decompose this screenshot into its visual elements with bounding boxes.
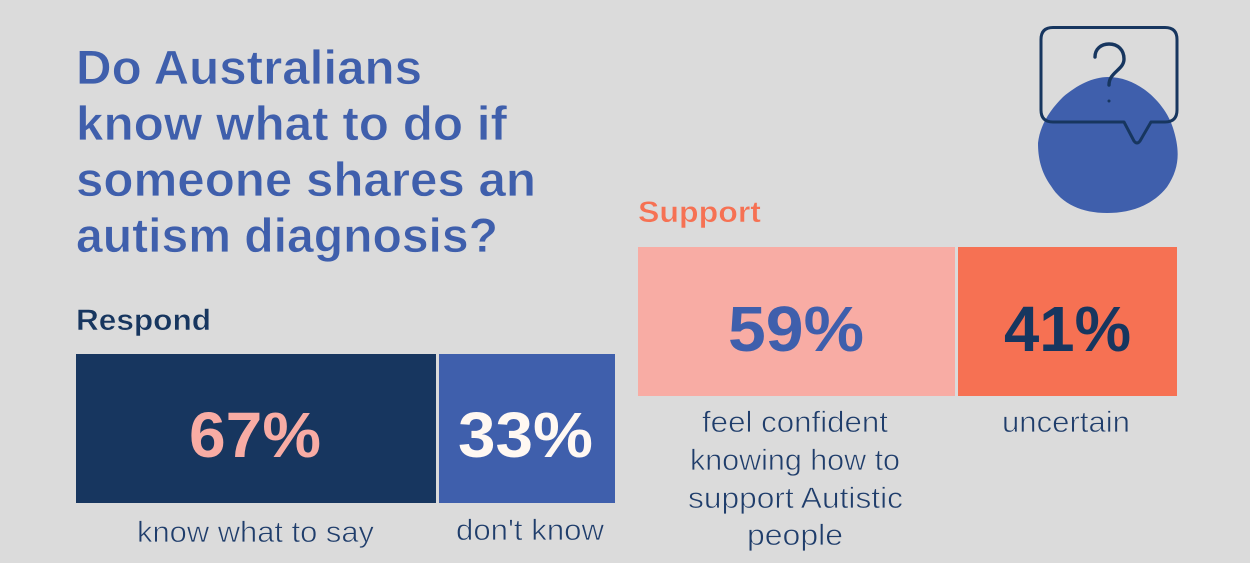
label: don't know: don't know: [456, 514, 604, 547]
bar: 67% know what to say: [76, 354, 436, 503]
bar: 59% feel confident: [638, 247, 955, 396]
title: Do Australians: [76, 42, 422, 95]
title: [76, 42, 536, 263]
label: feel confident knowing how to support Autistic people: support Autistic: [688, 482, 903, 515]
bar: 33% don't know: [439, 354, 615, 503]
bar: 33% don't know: 33%: [458, 399, 593, 471]
icon: speech bubble with question mark over blue blob: [1038, 28, 1178, 213]
label: feel confident knowing how to support Autistic people: knowing how to: [690, 444, 900, 477]
bar: 41% uncertain: [958, 247, 1177, 396]
panel: support: [638, 196, 1177, 552]
label: know what to say: know what to say: [137, 516, 374, 549]
panel: respond: [76, 304, 615, 549]
label: feel confident knowing how to support Autistic people: [688, 406, 903, 552]
title: autism diagnosis?: [76, 210, 498, 263]
label: uncertain: uncertain: [1002, 406, 1130, 439]
bar: 41% uncertain: 41%: [1004, 293, 1131, 365]
title: know what to do if: [76, 98, 508, 151]
heading: respond: Respond: [76, 304, 211, 337]
label: feel confident knowing how to support Autistic people: feel confident: [702, 406, 889, 439]
bar: 67% know what to say: 67%: [189, 399, 321, 471]
bar: 59% feel confident: 59%: [728, 293, 864, 365]
label: feel confident knowing how to support Autistic people: people: [747, 519, 843, 552]
title: someone shares an: [76, 154, 536, 207]
heading: support: Support: [638, 196, 761, 229]
